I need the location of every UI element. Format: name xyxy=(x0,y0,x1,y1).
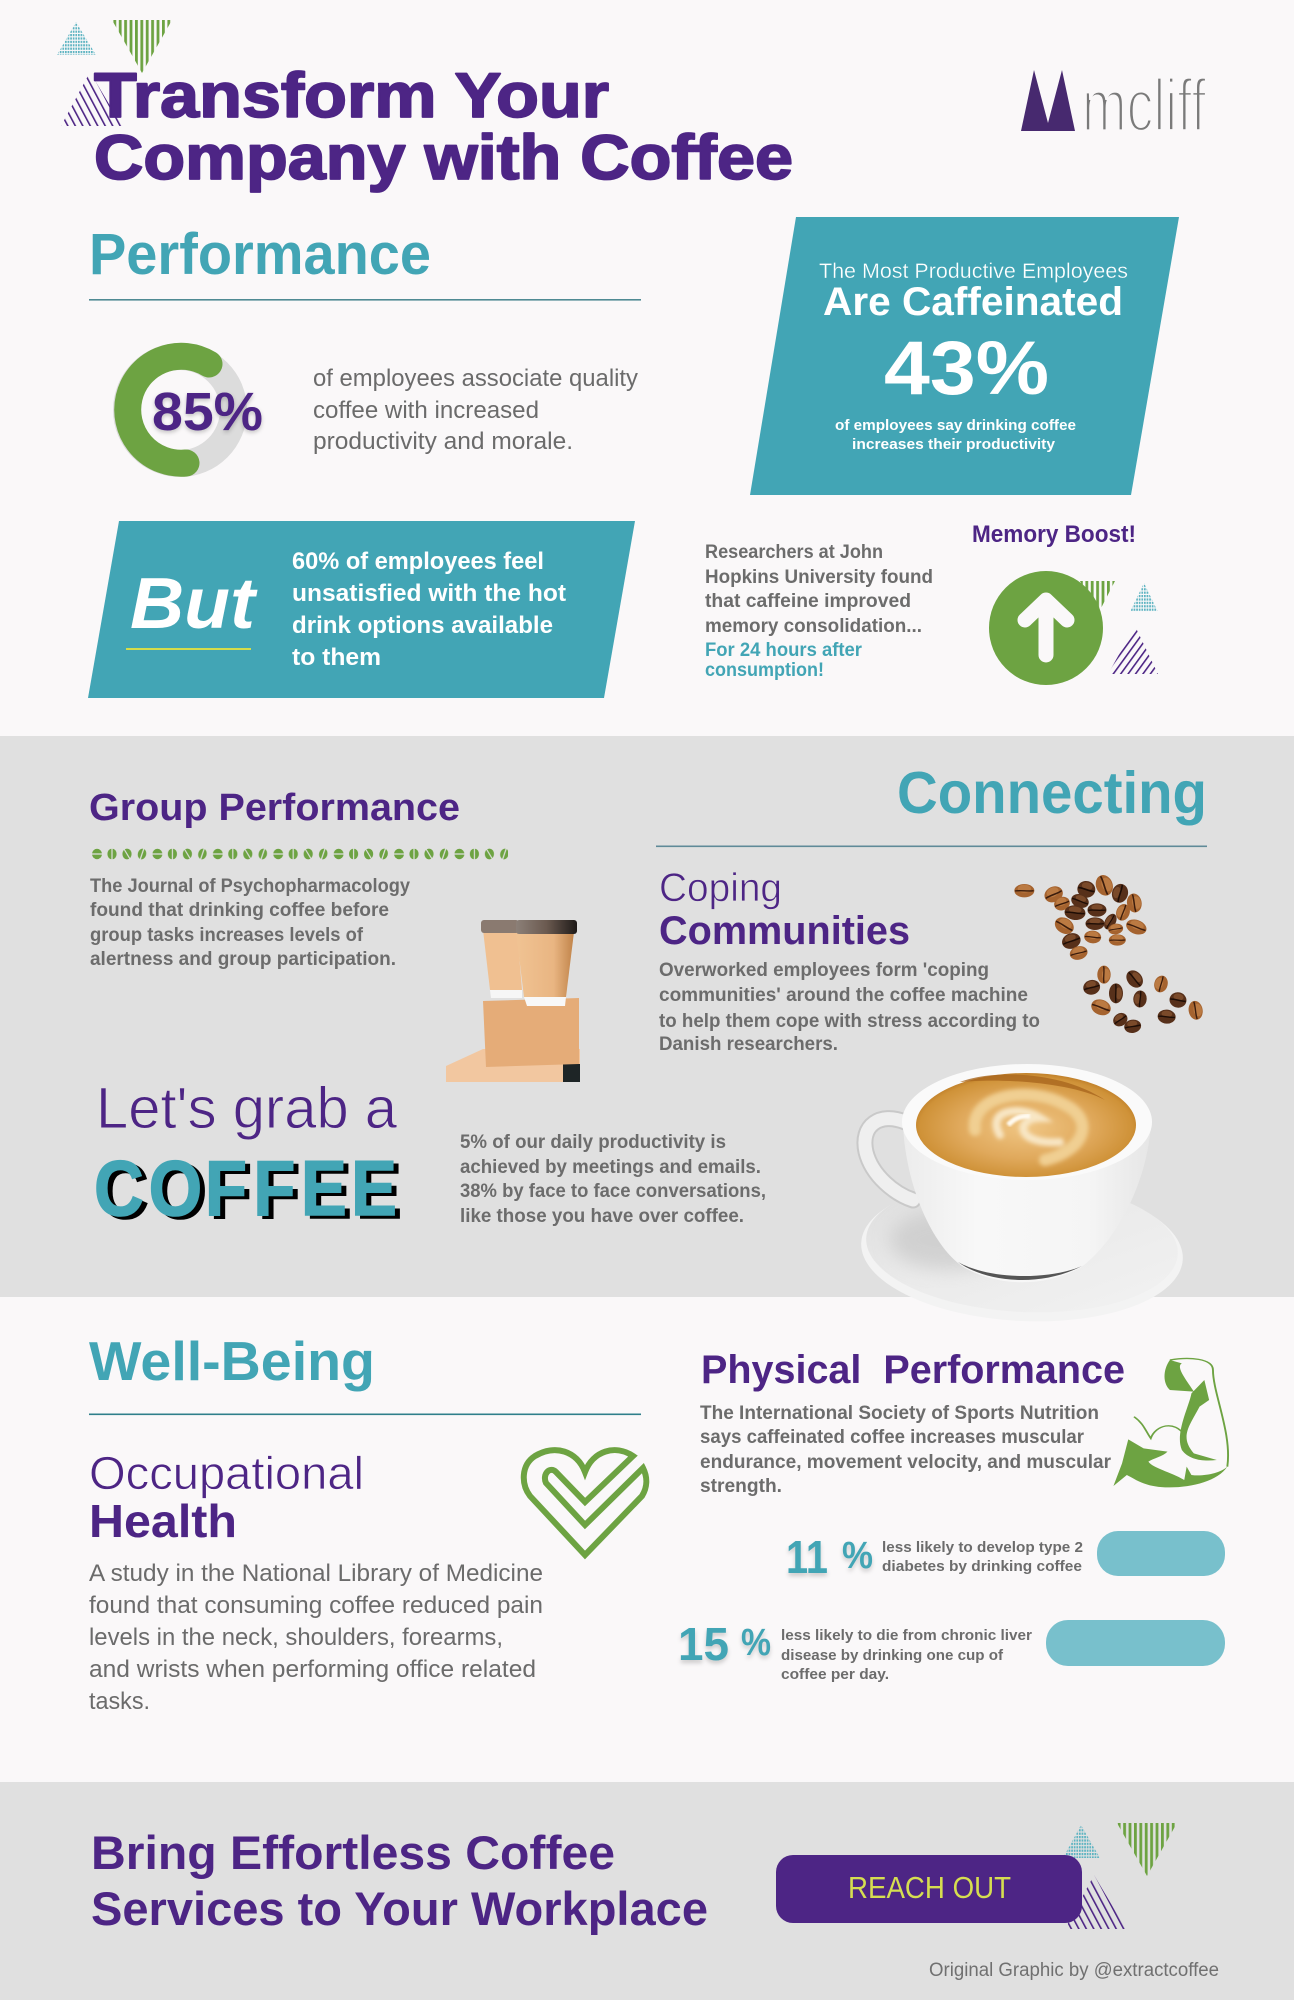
text: journal of psychopharmacology xyxy=(90,876,410,970)
heading: performance: Performance xyxy=(89,222,431,287)
text: john hopkins research: Hopkins University found xyxy=(705,567,933,588)
text: daily productivity: achieved by meetings and emails. xyxy=(460,1157,761,1178)
stat: 15%: less likely to die from chronic liver xyxy=(781,1627,1032,1644)
text: physical performance body: endurance, movement velocity, and muscular xyxy=(700,1452,1112,1473)
title: Company with Coffee xyxy=(94,123,793,193)
text: occupational health body xyxy=(89,1560,543,1715)
text: daily productivity: like those you have over coffee. xyxy=(460,1206,744,1227)
heading: occupational health: Occupational xyxy=(89,1447,364,1499)
text: physical performance body: The International Society of Sports Nutrition xyxy=(700,1403,1099,1424)
stat: 15%: coffee per day. xyxy=(781,1666,889,1683)
text: physical performance body: strength. xyxy=(700,1476,782,1497)
heading: well-being: Well-Being xyxy=(89,1330,375,1392)
panel: but callout: drink options available xyxy=(292,612,553,639)
text: 85% description: of employees associate quality xyxy=(313,365,638,392)
panel: most productive employees: The Most Productive Employees xyxy=(819,260,1128,283)
image: scattered coffee beans xyxy=(1014,873,1204,1034)
heading: occupational health xyxy=(89,1447,364,1547)
heading: coping communities: Communities xyxy=(659,909,910,953)
header decorative triangles xyxy=(57,20,172,126)
text: 85% description: coffee with increased xyxy=(313,397,539,424)
text: john hopkins research: Researchers at John xyxy=(705,542,883,563)
text: original graphic credit: Original Graphic by @extractcoffee xyxy=(929,1960,1219,1981)
logo: mcliff xyxy=(1021,64,1206,147)
stat: 15%: disease by drinking one cup of xyxy=(781,1647,1004,1664)
heading: memory boost: Memory Boost! xyxy=(972,521,1136,548)
panel: most productive employees: increases their productivity xyxy=(852,436,1056,453)
stat: 11%: % xyxy=(842,1535,873,1577)
text: coping communities body: Overworked employees form 'coping xyxy=(659,960,989,981)
heading: let's grab a coffee: COFFEE xyxy=(99,1147,402,1235)
panel: but callout xyxy=(88,521,635,698)
button: reach out: REACH OUT xyxy=(848,1870,1011,1905)
stat: 11%: less likely to develop type 2 xyxy=(882,1539,1083,1556)
text: daily productivity: 5% of our daily productivity is xyxy=(460,1132,726,1153)
heading: bring effortless coffee services: Bring Effortless Coffee xyxy=(91,1826,615,1879)
donut chart: 85% xyxy=(113,343,263,477)
panel: footer call to action xyxy=(91,1823,1219,1981)
stat: 15% xyxy=(678,1618,1225,1683)
heading: bring effortless coffee services: Services to Your Workplace xyxy=(91,1882,708,1935)
stat: 15%: % xyxy=(741,1622,771,1664)
panel: most productive employees: 43% xyxy=(884,326,1049,411)
title: Transform Your xyxy=(94,61,609,131)
stat: 15%: 15 xyxy=(678,1618,729,1670)
text: occupational health body: A study in the National Library of Medicine xyxy=(89,1560,543,1587)
text: john hopkins research: For 24 hours after xyxy=(705,640,863,661)
image: takeaway cups on boxes xyxy=(446,920,580,1082)
heading: let's grab a coffee xyxy=(94,1076,402,1235)
image: latte cup on saucer xyxy=(858,1064,1186,1329)
panel: but callout: 60% of employees feel xyxy=(292,548,544,575)
icon: memory boost arrow with triangles xyxy=(989,571,1158,685)
text: john hopkins research: that caffeine improved xyxy=(705,591,911,612)
stat: 11%: 11 xyxy=(786,1531,828,1583)
text: john hopkins research: consumption! xyxy=(705,660,824,681)
text: occupational health body: levels in the neck, shoulders, forearms, xyxy=(89,1624,503,1651)
text: occupational health body: found that consuming coffee reduced pain xyxy=(89,1592,543,1619)
text: 85% description: productivity and morale. xyxy=(313,428,573,455)
panel: but callout: But xyxy=(130,564,258,644)
heading: group performance: Group Performance xyxy=(89,787,460,829)
text: journal of psychopharmacology: The Journal of Psychopharmacology xyxy=(90,876,410,897)
heading: physical performance: Physical Performance xyxy=(701,1348,1125,1392)
text: coping communities body: Danish researchers. xyxy=(659,1034,838,1055)
stat: 11%: diabetes by drinking coffee xyxy=(882,1558,1082,1575)
heading: connecting: Connecting xyxy=(897,760,1207,826)
text: coping communities body: communities' around the coffee machine xyxy=(659,985,1028,1006)
footer decorative triangles xyxy=(1063,1823,1177,1929)
text: physical performance body: says caffeinated coffee increases muscular xyxy=(700,1427,1085,1448)
title xyxy=(94,61,793,193)
text: journal of psychopharmacology: group tasks increases levels of xyxy=(90,925,364,946)
panel: but callout: unsatisfied with the hot xyxy=(292,580,566,607)
text: physical performance body xyxy=(700,1403,1112,1497)
donut chart: 85%: 85% xyxy=(152,382,263,442)
panel: but callout: to them xyxy=(292,644,381,671)
text: journal of psychopharmacology: found that drinking coffee before xyxy=(90,900,389,921)
button: reach out xyxy=(776,1855,1082,1923)
icon: flexed arm xyxy=(1113,1358,1228,1487)
text: occupational health body: tasks. xyxy=(89,1688,150,1715)
text: 85% description xyxy=(313,365,638,455)
panel: connecting section xyxy=(89,760,1207,1329)
text: daily productivity: 38% by face to face conversations, xyxy=(460,1181,766,1202)
panel: performance xyxy=(88,217,1179,698)
text: occupational health body: and wrists when performing office related xyxy=(89,1656,536,1683)
heading: let's grab a coffee: Let's grab a xyxy=(96,1076,398,1141)
text: coping communities body: to help them cope with stress according to xyxy=(659,1011,1040,1032)
panel: most productive employees: of employees say drinking coffee xyxy=(835,417,1076,434)
heading: coping communities: Coping xyxy=(659,866,782,910)
text: journal of psychopharmacology: alertness and group participation. xyxy=(90,949,396,970)
text: john hopkins research: memory consolidation... xyxy=(705,616,922,637)
heading: coping communities xyxy=(659,866,910,953)
panel: most productive employees xyxy=(750,217,1179,495)
heading: occupational health: Health xyxy=(89,1495,237,1547)
stat: 11% xyxy=(786,1531,1225,1583)
panel: well-being xyxy=(89,1330,1228,1715)
text: john hopkins research xyxy=(705,542,933,681)
divider: coffee beans row xyxy=(92,847,508,861)
text: coping communities body xyxy=(659,960,1040,1055)
icon: heart with check xyxy=(524,1450,646,1555)
text: daily productivity xyxy=(460,1132,766,1227)
logo: mcliff: mcliff xyxy=(1082,64,1206,147)
heading: bring effortless coffee services xyxy=(91,1826,708,1935)
panel: most productive employees: Are Caffeinated xyxy=(823,280,1123,324)
heading: let's grab a coffee: COFFEE xyxy=(94,1144,397,1232)
